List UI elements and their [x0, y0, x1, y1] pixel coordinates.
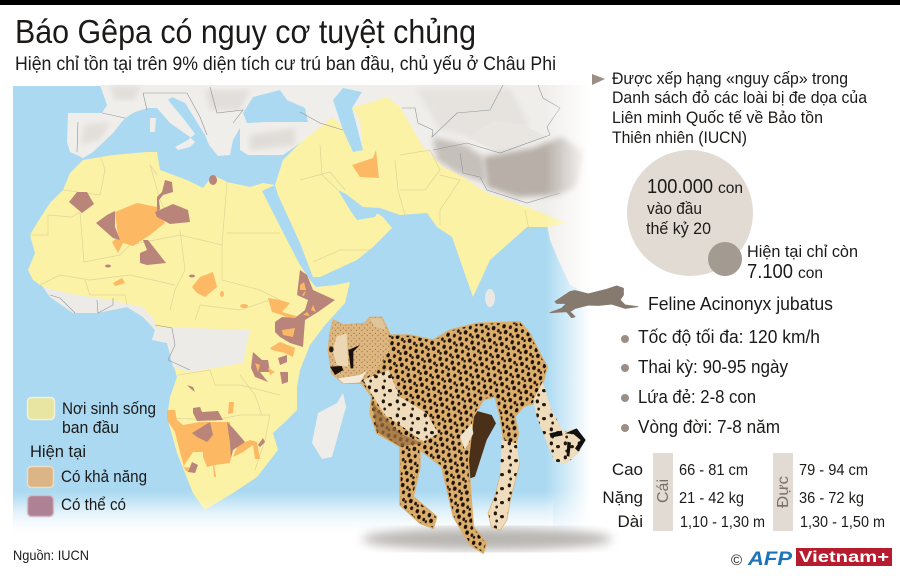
Persian Gulf [338, 190, 380, 220]
fact: lifespan: Vòng đời: 7-8 năm [638, 417, 780, 437]
row labels [602, 460, 643, 531]
species name: Feline Acinonyx jubatus [648, 294, 833, 314]
Caspian Sea [333, 88, 363, 152]
male values: 79 - 94 cm [799, 462, 868, 479]
Vietnam+ logo: Vietnam+ [799, 549, 889, 566]
top black bar [0, 0, 900, 5]
pale flank patch [460, 423, 473, 450]
AFP logo: AFP [747, 549, 792, 570]
fact: gestation: Thai kỳ: 90-95 ngày [638, 357, 788, 377]
female values [679, 462, 765, 531]
original range: Africa [28, 152, 350, 510]
current population label: Hiện tại chỉ còn [747, 242, 858, 261]
row labels: Cao [612, 460, 643, 479]
current population label: 7.100 [747, 261, 793, 283]
female band [653, 453, 673, 531]
legend swatch: probable [28, 496, 54, 516]
species facts list [621, 327, 820, 437]
legend label: possible: Có khả năng [61, 467, 147, 486]
historic population label: thế kỷ 20 [646, 219, 711, 238]
bottom fade [13, 497, 553, 537]
female band: Cái [655, 479, 672, 503]
dark belly [372, 400, 423, 447]
tail [533, 382, 586, 463]
fact: litter size: Lứa đẻ: 2-8 con [638, 387, 756, 407]
population comparison [627, 150, 858, 283]
Sri Lanka [485, 289, 495, 307]
current range: possible (orange) [112, 150, 379, 477]
female values: 1,10 - 1,30 m [680, 514, 765, 531]
cheetah illustration [328, 317, 586, 553]
conservation status note [592, 69, 868, 147]
legend swatch: possible [28, 466, 54, 488]
cheetah shadow [362, 528, 612, 550]
Sardinia [150, 118, 156, 132]
male values [799, 462, 885, 531]
icon: running cheetah silhouette [550, 286, 638, 318]
current population label: con [798, 265, 823, 282]
circle: 100,000 historic population [627, 150, 753, 276]
internal borders [30, 145, 530, 470]
credit logos [731, 548, 892, 570]
historic population label: vào đầu [647, 199, 702, 218]
measurements table [602, 453, 885, 531]
Madagascar [312, 393, 346, 459]
far foreleg [465, 410, 496, 478]
current population label [747, 242, 858, 283]
legend swatch: original habitat [28, 398, 54, 420]
subtitle: Hiện chỉ tồn tại trên 9% diện tích cư trú ban đầu, chủ yếu ở Châu Phi [15, 54, 556, 75]
male values: 1,30 - 1,50 m [800, 514, 885, 531]
status text: Thiên nhiên (IUCN) [612, 128, 747, 147]
historic population label: 100.000 [647, 176, 713, 198]
dark country borders [50, 85, 560, 370]
orange inside purple [255, 282, 316, 375]
male band: Đực [775, 476, 792, 508]
right fade [545, 85, 590, 537]
status text: Danh sách đỏ các loài bị đe dọa của [612, 88, 868, 107]
legend label: original habitat [62, 399, 156, 437]
original range: Middle East and India [275, 97, 567, 297]
fact: top speed: Tốc độ tối đa: 120 km/h [638, 327, 820, 347]
status text: Được xếp hạng «nguy cấp» trong [612, 69, 848, 88]
icon: arrow marker [592, 74, 605, 85]
hind leg pale [488, 440, 519, 530]
legend [28, 398, 156, 516]
current range: probable (purple) [69, 175, 335, 473]
head [328, 317, 390, 383]
copyright symbol: © [731, 552, 742, 569]
chest [363, 370, 438, 442]
Black Sea [243, 90, 308, 123]
map of cheetah range [13, 80, 610, 540]
source: Nguồn: IUCN [13, 547, 89, 563]
legend heading: current: Hiện tại [30, 442, 86, 461]
legend label: original habitat: ban đầu [62, 418, 119, 437]
legend label: original habitat: Nơi sinh sống [62, 399, 156, 418]
body [328, 317, 547, 553]
male band [773, 453, 793, 531]
historic population label: con [718, 180, 743, 197]
female values: 21 - 42 kg [679, 490, 744, 507]
historic population label [646, 176, 743, 238]
title: Báo Gêpa có nguy cơ tuyệt chủng [15, 13, 476, 50]
Eurasia land [67, 85, 603, 459]
female values: 66 - 81 cm [679, 462, 748, 479]
legend label: probable: Có thể có [61, 495, 126, 514]
row labels: Nặng [602, 488, 643, 507]
row labels: Dài [617, 512, 643, 531]
male values: 36 - 72 kg [799, 490, 864, 507]
central Africa unshaded land [43, 287, 250, 372]
circle: 7,100 current population [708, 242, 742, 276]
status text [612, 69, 868, 147]
status text: Liên minh Quốc tế về Bảo tồn [612, 108, 823, 127]
